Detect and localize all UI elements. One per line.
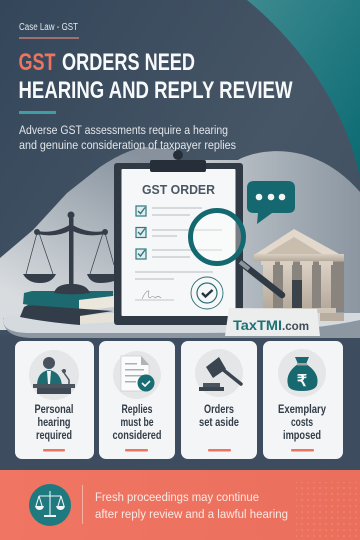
label [112, 404, 162, 442]
icon: document with check [113, 351, 161, 399]
footer text: after reply review and a lawful hearing [95, 507, 288, 521]
kicker: Case Law - GST [19, 22, 79, 39]
checklist [136, 206, 146, 259]
shelf [3, 313, 360, 338]
label [34, 404, 74, 442]
label: set aside [199, 417, 239, 429]
label: hearing [38, 417, 70, 429]
title [18, 49, 293, 104]
accent rule [19, 111, 56, 114]
card: personal hearing [15, 341, 94, 459]
icon: gavel [195, 349, 243, 397]
tag: TaxTMI.com: TaxTMI [233, 318, 282, 333]
icon: speaker at podium [29, 350, 79, 400]
subtitle [19, 123, 236, 152]
icon: speech bubble [247, 181, 295, 224]
tag: TaxTMI.com: .com [282, 319, 309, 333]
icon: scales of justice [23, 212, 114, 294]
icon: magnifying glass [190, 210, 282, 295]
label: must be [120, 417, 154, 429]
tag: TaxTMI.com [225, 308, 320, 336]
footer text [95, 490, 288, 521]
icon: scales badge [29, 484, 71, 526]
clip [150, 150, 206, 172]
card: orders set aside [181, 341, 257, 459]
icon: money bag: ₹ [297, 373, 307, 390]
title: ORDERS NEED [62, 49, 195, 76]
card: replies considered [99, 341, 175, 459]
subtitle: Adverse GST assessments require a hearing [19, 123, 228, 137]
signature [135, 291, 174, 300]
footer band [0, 470, 360, 540]
kicker: Case Law - GST: Case Law - GST [19, 22, 78, 33]
footer text: Fresh proceedings may continue [95, 490, 259, 504]
clipboard [114, 150, 243, 325]
subtitle: and genuine consideration of taxpayer replies [19, 138, 236, 152]
text lines [135, 207, 222, 280]
label: Exemplary [278, 404, 326, 416]
label: Orders [204, 404, 234, 416]
icon: books [20, 291, 114, 325]
label: required [36, 430, 72, 442]
label: costs [291, 417, 313, 429]
approval seal [191, 277, 223, 309]
label [199, 404, 239, 429]
label: Personal [34, 404, 74, 416]
card: exemplary costs [263, 341, 343, 459]
label: imposed [283, 430, 321, 442]
title: GST [18, 49, 56, 76]
label: Replies [122, 404, 152, 416]
heading: GST ORDER: GST ORDER [142, 182, 216, 197]
label: considered [112, 430, 162, 442]
label [278, 404, 326, 442]
icon: courthouse [254, 229, 344, 321]
